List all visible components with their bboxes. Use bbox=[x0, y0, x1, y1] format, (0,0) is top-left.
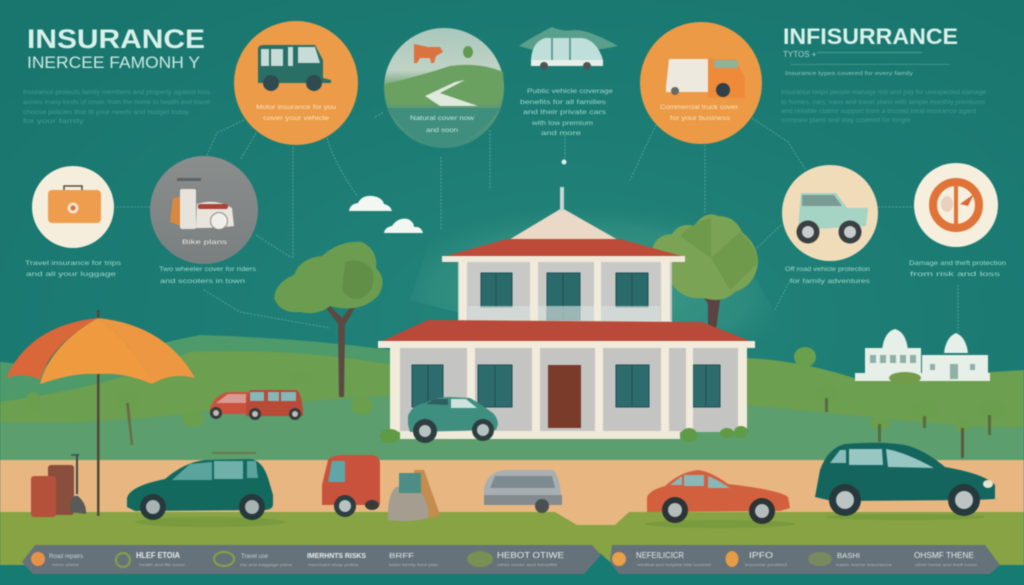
body text right: Insurance helps people manage risk and pay for unexpected damage bbox=[781, 90, 987, 96]
caption under case: and all your luggage bbox=[26, 272, 117, 278]
caption under case: Travel insurance for trips bbox=[25, 261, 121, 267]
upper roof bbox=[442, 239, 685, 257]
caption under jeep: Off road vehicle protection bbox=[785, 267, 870, 273]
caption under jeep: for family adventures bbox=[790, 279, 870, 285]
teal hatchback on road bbox=[127, 452, 273, 520]
caption under van: benefits for all families bbox=[520, 100, 606, 106]
icon: river bbox=[425, 80, 478, 106]
title right bbox=[783, 24, 958, 77]
lower columns bbox=[390, 348, 747, 432]
icon: jeep bbox=[796, 193, 868, 244]
body text left: for your family bbox=[23, 119, 84, 125]
body text right: compare plans and stay covered for longer bbox=[781, 118, 911, 124]
item 6 bbox=[467, 551, 564, 567]
title left bbox=[27, 24, 205, 72]
silver car bbox=[484, 470, 562, 513]
clouds bbox=[349, 196, 423, 233]
landscape hills bbox=[0, 335, 1024, 566]
spire antenna bbox=[562, 160, 566, 164]
caption bbox=[410, 116, 475, 134]
caption under case bbox=[25, 261, 121, 278]
item 2: HLEF ETOIA bbox=[136, 551, 180, 560]
spire bbox=[560, 187, 564, 211]
item 8: IPFO bbox=[749, 551, 773, 560]
item 4 bbox=[307, 551, 366, 567]
caption: Commercial truck cover bbox=[660, 105, 738, 111]
shadows on grass bbox=[135, 514, 985, 528]
item 3: trip and baggage plans bbox=[240, 562, 292, 567]
icon: prohibition ring bbox=[933, 182, 979, 228]
caption: cover your vehicle bbox=[263, 116, 330, 122]
heading: INFISURRANCE bbox=[783, 24, 958, 49]
caption under scooter bbox=[159, 267, 256, 285]
body text right: and reliable claims support from a trusted local insurance agent bbox=[781, 109, 976, 115]
caption under jeep bbox=[785, 267, 870, 285]
caption under van bbox=[520, 89, 614, 137]
caption: Motor insurance for you bbox=[256, 105, 336, 111]
porch base bbox=[400, 431, 680, 439]
right tree bbox=[652, 214, 758, 330]
mosque bbox=[855, 329, 990, 384]
heading: INSURANCE bbox=[27, 24, 205, 54]
body text left bbox=[23, 90, 210, 125]
item 9: basic home insurance bbox=[836, 562, 893, 567]
item 5: BRFF bbox=[389, 551, 415, 560]
circle: orange bus bbox=[234, 21, 358, 145]
gable bbox=[507, 208, 620, 241]
caption: Natural cover now bbox=[410, 116, 475, 122]
icon: cow bbox=[414, 44, 443, 63]
item 6: HEBOT OTIWE bbox=[497, 551, 564, 560]
large teal car bbox=[815, 443, 995, 516]
upper columns bbox=[458, 262, 672, 328]
left tree bbox=[274, 242, 383, 397]
item 8 bbox=[726, 551, 788, 567]
item 10 bbox=[914, 551, 978, 567]
caption under sign: from risk and loss bbox=[910, 272, 1000, 278]
item 9 bbox=[808, 552, 893, 567]
circle: landscape bbox=[384, 28, 504, 148]
caption: and soon bbox=[426, 128, 458, 134]
item 1 bbox=[31, 552, 83, 567]
circle: orange truck bbox=[640, 22, 762, 144]
shrubs near house bbox=[380, 426, 748, 443]
item 3: Travel use bbox=[241, 554, 269, 560]
sunburst fan behind house bbox=[380, 205, 800, 380]
circle: luggage case bbox=[32, 166, 114, 248]
item 4: IMERHNTS RISKS bbox=[307, 551, 366, 560]
suitcases bbox=[31, 454, 86, 517]
item 2: health and life cover bbox=[139, 562, 186, 567]
body text right: to homes, cars, vans and travel plans with simple monthly premiums bbox=[781, 100, 985, 106]
door bbox=[548, 365, 581, 428]
umbrella bbox=[6, 310, 195, 516]
upper floor wall bbox=[458, 260, 672, 326]
red delivery van bbox=[322, 455, 380, 517]
connector lines bbox=[113, 112, 958, 335]
item 7 bbox=[612, 551, 711, 567]
lower floor wall bbox=[390, 346, 746, 432]
caption under sign bbox=[909, 261, 1006, 278]
item 3 bbox=[214, 552, 292, 567]
upper balcony bbox=[468, 306, 660, 321]
bottom ribbon right bbox=[610, 545, 1000, 574]
item 4: merchant shop policy bbox=[308, 562, 358, 567]
road bbox=[0, 460, 1024, 525]
item 6: other cover and benefits bbox=[497, 562, 557, 567]
item 7: medical and hospital bills covered bbox=[637, 562, 711, 567]
caption: for your business bbox=[670, 116, 730, 122]
body text left: across many kinds of cover, from the home to health and travel bbox=[23, 100, 210, 106]
icon: small tree bbox=[463, 46, 473, 58]
item 10: other home and theft cover bbox=[915, 562, 978, 567]
caption under sign: Damage and theft protection bbox=[909, 261, 1006, 267]
caption bbox=[660, 105, 738, 122]
icon: truck bbox=[666, 59, 745, 98]
bags bbox=[388, 470, 440, 521]
lower roof bbox=[378, 320, 755, 343]
item 5 bbox=[389, 551, 438, 567]
circle: no-risk sign bbox=[914, 163, 998, 247]
item 9: BASHI bbox=[837, 553, 860, 560]
item 1: Road repairs bbox=[49, 554, 83, 560]
caption under van: and more bbox=[541, 131, 582, 137]
lower windows bbox=[412, 365, 720, 407]
item 5: basic family fund plan bbox=[389, 562, 438, 567]
small trees on hills bbox=[26, 347, 1007, 458]
body text left: choose policies that fit your needs and budget today bbox=[23, 110, 189, 116]
caption under van: with low premium bbox=[531, 121, 593, 127]
bottom ribbon left bbox=[22, 545, 601, 574]
body text left: Insurance protects family members and property against loss bbox=[23, 90, 210, 96]
green car at house bbox=[408, 397, 498, 443]
item 1: minor claims bbox=[52, 562, 79, 567]
house bbox=[378, 187, 755, 439]
title right: Insurance types covered for every family bbox=[785, 71, 913, 77]
icon: van with hills bbox=[519, 27, 618, 70]
caption bbox=[256, 105, 336, 122]
icon: orange case bbox=[48, 186, 101, 223]
caption under van: Public vehicle coverage bbox=[527, 89, 614, 95]
item 10: OHSMF THENE bbox=[914, 551, 974, 560]
bottom teal band bbox=[0, 553, 1024, 585]
caption under scooter: and scooters in town bbox=[160, 279, 245, 285]
caption under scooter: Two wheeler cover for riders bbox=[159, 267, 256, 273]
caption: Bike plans bbox=[182, 240, 227, 246]
small red cars on hill bbox=[210, 390, 303, 420]
subtitle: INERCEE FAMONH Y bbox=[27, 53, 200, 72]
item 7: NEFEILICICR bbox=[636, 551, 684, 560]
icon: scooter bbox=[170, 178, 234, 230]
item 8: income protect bbox=[745, 562, 788, 567]
caption under van: and their private cars bbox=[523, 110, 606, 116]
item 2 bbox=[116, 551, 186, 567]
body text right bbox=[781, 90, 987, 124]
subtitle: TYTOS + bbox=[783, 50, 817, 59]
icon: bus bbox=[258, 45, 331, 91]
orange sedan bbox=[647, 470, 790, 524]
upper windows bbox=[481, 273, 648, 320]
circle: mint jeep bbox=[782, 165, 878, 261]
circle: scooter bbox=[150, 156, 258, 264]
